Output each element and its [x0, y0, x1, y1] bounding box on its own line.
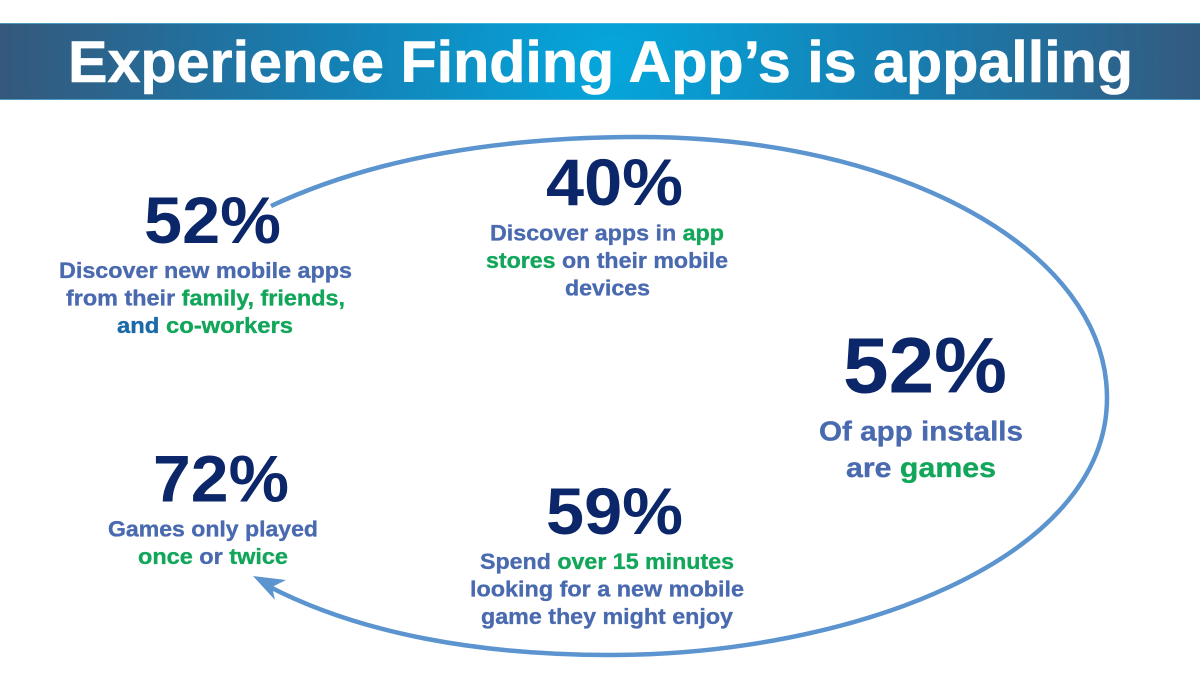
stat: games played once or twice: once or twice [138, 544, 288, 569]
stat: time spent looking [470, 474, 744, 629]
stat: games played once or twice: 72% [153, 442, 289, 516]
stat: time spent looking: Spend over 15 minutes [480, 549, 734, 574]
stat: family, friends, co-workers: from their family, friends, [66, 286, 345, 310]
stat: app stores: 40% [546, 145, 683, 219]
stat: family, friends, co-workers: and co-workers [117, 313, 293, 338]
stat: games played once or twice: Games only played [108, 516, 318, 542]
stat: family, friends, co-workers [59, 183, 352, 338]
stat: app stores: devices [565, 276, 650, 300]
title banner [0, 23, 1200, 100]
stat: app stores: Discover apps in app [490, 220, 724, 246]
stat: app stores [486, 145, 728, 300]
stat: app installs are games: 52% [843, 320, 1007, 410]
title: Experience Finding App’s is appalling [68, 30, 1133, 95]
stat: app installs are games: are games [846, 452, 996, 483]
stat: app installs are games: Of app installs [819, 416, 1023, 446]
cycle arrow [253, 137, 1107, 655]
stat: app stores: stores on their mobile [486, 248, 728, 273]
stat: time spent looking: 59% [546, 474, 683, 548]
stat: time spent looking: looking for a new mobile [470, 576, 744, 602]
stat: time spent looking: game they might enjoy [481, 604, 734, 629]
stat: games played once or twice [108, 442, 318, 569]
stat: family, friends, co-workers: Discover new mobile apps [59, 258, 352, 283]
stat: app installs are games [819, 320, 1023, 483]
stat: family, friends, co-workers: 52% [144, 183, 281, 257]
